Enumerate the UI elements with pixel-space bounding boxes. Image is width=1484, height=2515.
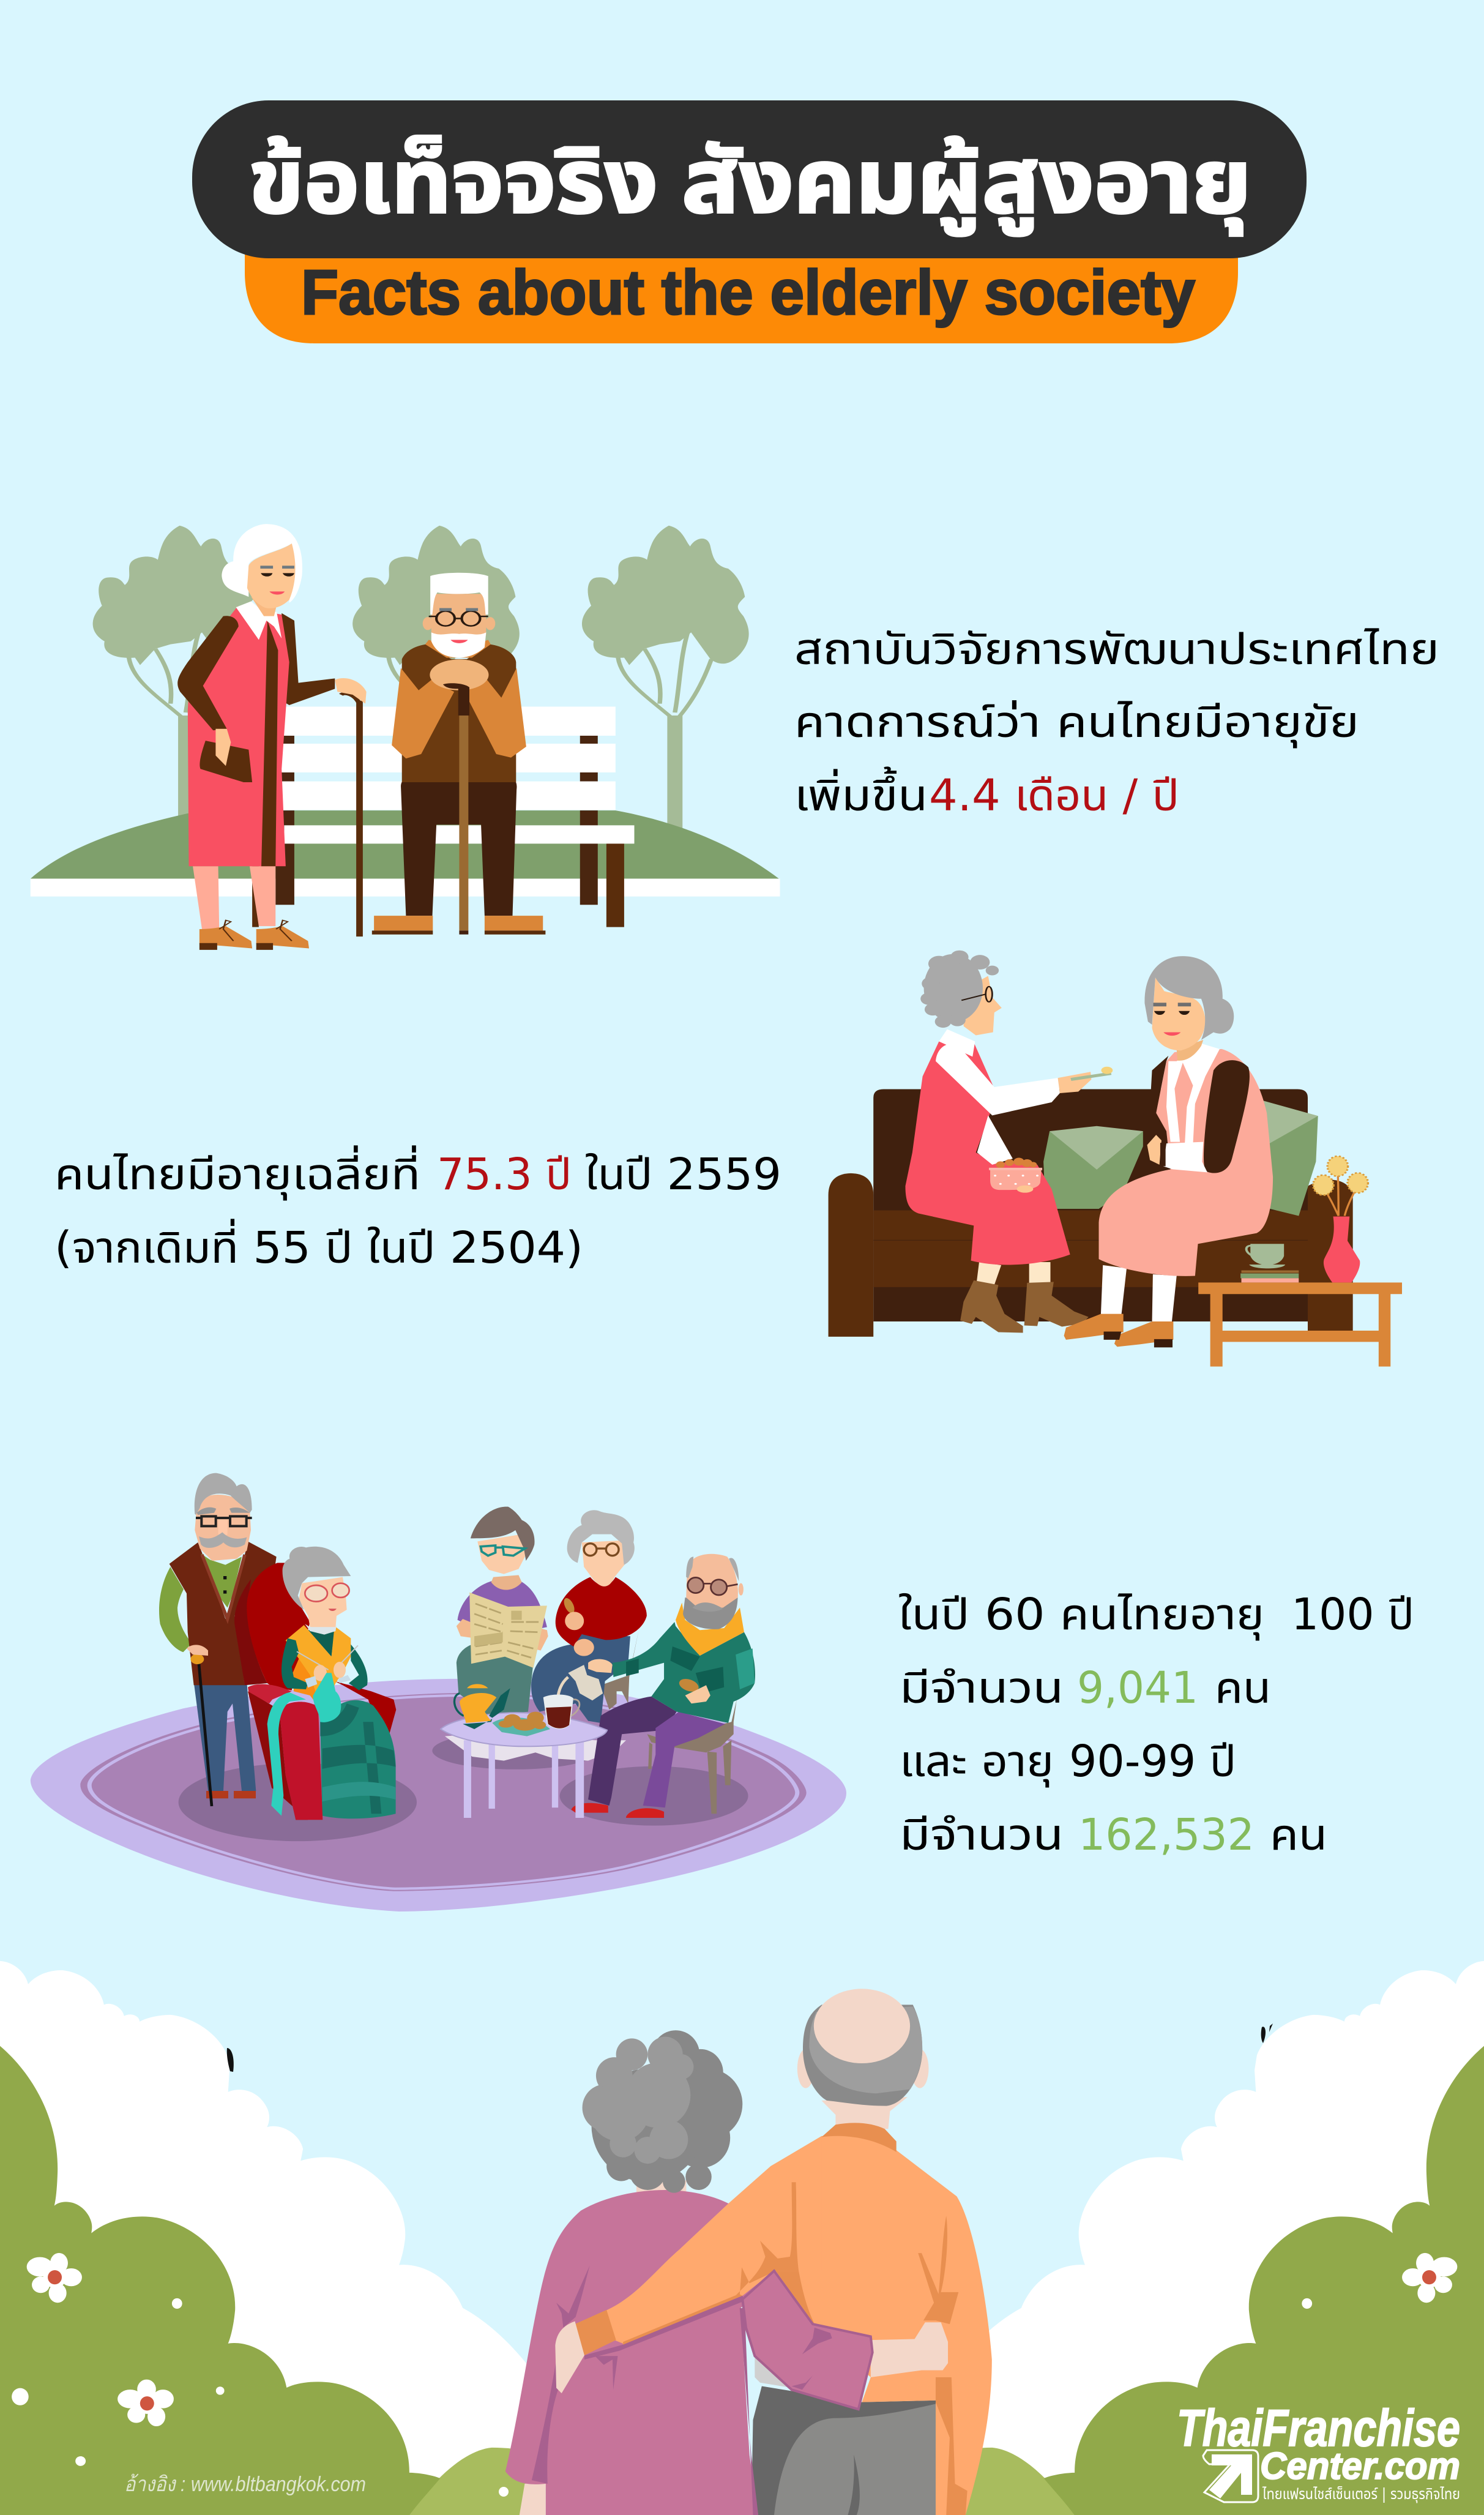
woman reading newspaper	[457, 1507, 548, 1716]
text block: life expectancy increase: คาดการณ์ว่า คนไทยมีอายุขัย	[794, 697, 1359, 749]
orange subtitle pill	[245, 245, 1238, 343]
text block: centenarian statistics	[898, 1589, 1414, 1860]
man	[736, 1989, 992, 2515]
woman in red sweater	[531, 1510, 647, 1723]
trees	[93, 526, 749, 828]
text block: average age: คนไทยมีอายุเฉลี่ยที่	[54, 1145, 420, 1201]
text block: centenarian statistics: และ อายุ	[900, 1736, 1054, 1788]
armchair	[234, 1563, 396, 1820]
text block: centenarian statistics: คน	[1215, 1662, 1271, 1713]
dot on light bush	[499, 2487, 509, 2497]
rug	[31, 1679, 846, 1911]
woman with spoon	[905, 951, 1113, 1332]
dark title pill	[192, 100, 1307, 258]
tea table	[441, 1684, 607, 1818]
text block: centenarian statistics: 100 ปี	[1291, 1589, 1414, 1640]
seated man with cane	[372, 573, 545, 935]
hill	[31, 810, 779, 879]
man's arm across her shoulders	[555, 2138, 821, 2393]
text block: life expectancy increase	[794, 624, 1439, 821]
landscape: left cloud and bushes	[0, 1961, 543, 2515]
logo: ThaiFranchise Center: Center.com	[1260, 2445, 1460, 2487]
illustration: elderly couple seen from behind	[505, 1989, 992, 2515]
lower flower and dots	[12, 2380, 225, 2466]
text block: centenarian statistics: มีจำนวน	[900, 1809, 1064, 1860]
cushions	[1043, 1101, 1318, 1216]
title banner	[192, 100, 1307, 343]
woman with cane	[177, 524, 367, 950]
standing man	[159, 1473, 277, 1806]
Thai title	[248, 130, 1251, 236]
illustration: women on a sofa, one feeding the other	[829, 951, 1402, 1367]
text block: life expectancy increase: สถาบันวิจัยการพัฒนาประเทศไทย	[794, 624, 1439, 675]
text block: average age: 75.3 ปี	[437, 1149, 572, 1200]
text block: life expectancy increase: 4.4 เดือน / ปี	[929, 770, 1179, 821]
tea group	[441, 1507, 755, 1818]
small black marks at cloud edges	[227, 2024, 1273, 2072]
text block: centenarian statistics: คน	[1270, 1809, 1327, 1860]
text block: average age	[54, 1145, 781, 1273]
Thai title: สังคมผู้สูงอายุ	[682, 130, 1251, 236]
standing man and armchair woman	[159, 1473, 396, 1820]
landscape: right cloud and bushes	[941, 1961, 1484, 2515]
sofa	[829, 1089, 1353, 1337]
illustration: group of elders on a purple rug	[31, 1473, 846, 1911]
logo: ThaiFranchise Center	[1177, 2399, 1460, 2503]
text block: centenarian statistics: 162,532	[1078, 1809, 1255, 1860]
illustration: elderly couple on a park bench	[31, 524, 780, 950]
knitting woman	[267, 1547, 396, 1820]
text block: centenarian statistics: 9,041	[1077, 1662, 1198, 1713]
woman's curly hair	[583, 2030, 742, 2193]
chair cushion behind table	[445, 1734, 626, 1761]
text block: average age: ในปี 2559	[585, 1149, 781, 1200]
text block: centenarian statistics: ในปี 60 คนไทยอายุ	[898, 1589, 1264, 1641]
logo arrow icon	[1203, 2450, 1258, 2502]
text block: average age: (จากเดิมที่ 55 ปี ในปี 2504)	[54, 1219, 583, 1273]
text block: centenarian statistics: 90-99 ปี	[1069, 1736, 1236, 1787]
woman's arm around his waist	[742, 2271, 948, 2409]
bench	[252, 706, 634, 927]
woman being fed	[1064, 956, 1273, 1347]
logo: ThaiFranchise Center: ไทยแฟรนไชส์เซ็นเตอร์ | รวมธุรกิจไทย	[1262, 2485, 1460, 2503]
white ground strip	[31, 879, 780, 897]
English subtitle: Facts about the elderly society	[301, 257, 1195, 327]
snack bowl	[989, 1157, 1042, 1193]
Thai title: ข้อเท็จจริง	[248, 130, 658, 234]
teapot	[454, 1684, 510, 1729]
bearded man pouring tea	[557, 1554, 755, 1818]
plate of cookies	[492, 1712, 550, 1736]
text block: centenarian statistics: มีจำนวน	[900, 1662, 1064, 1713]
source reference: อ้างอิง : www.bltbangkok.com	[124, 2473, 366, 2496]
woman	[505, 2180, 770, 2515]
glass of tea	[543, 1694, 580, 1729]
text block: life expectancy increase: เพิ่มขึ้น	[794, 766, 928, 821]
table with tea, books and vase	[1198, 1156, 1402, 1367]
